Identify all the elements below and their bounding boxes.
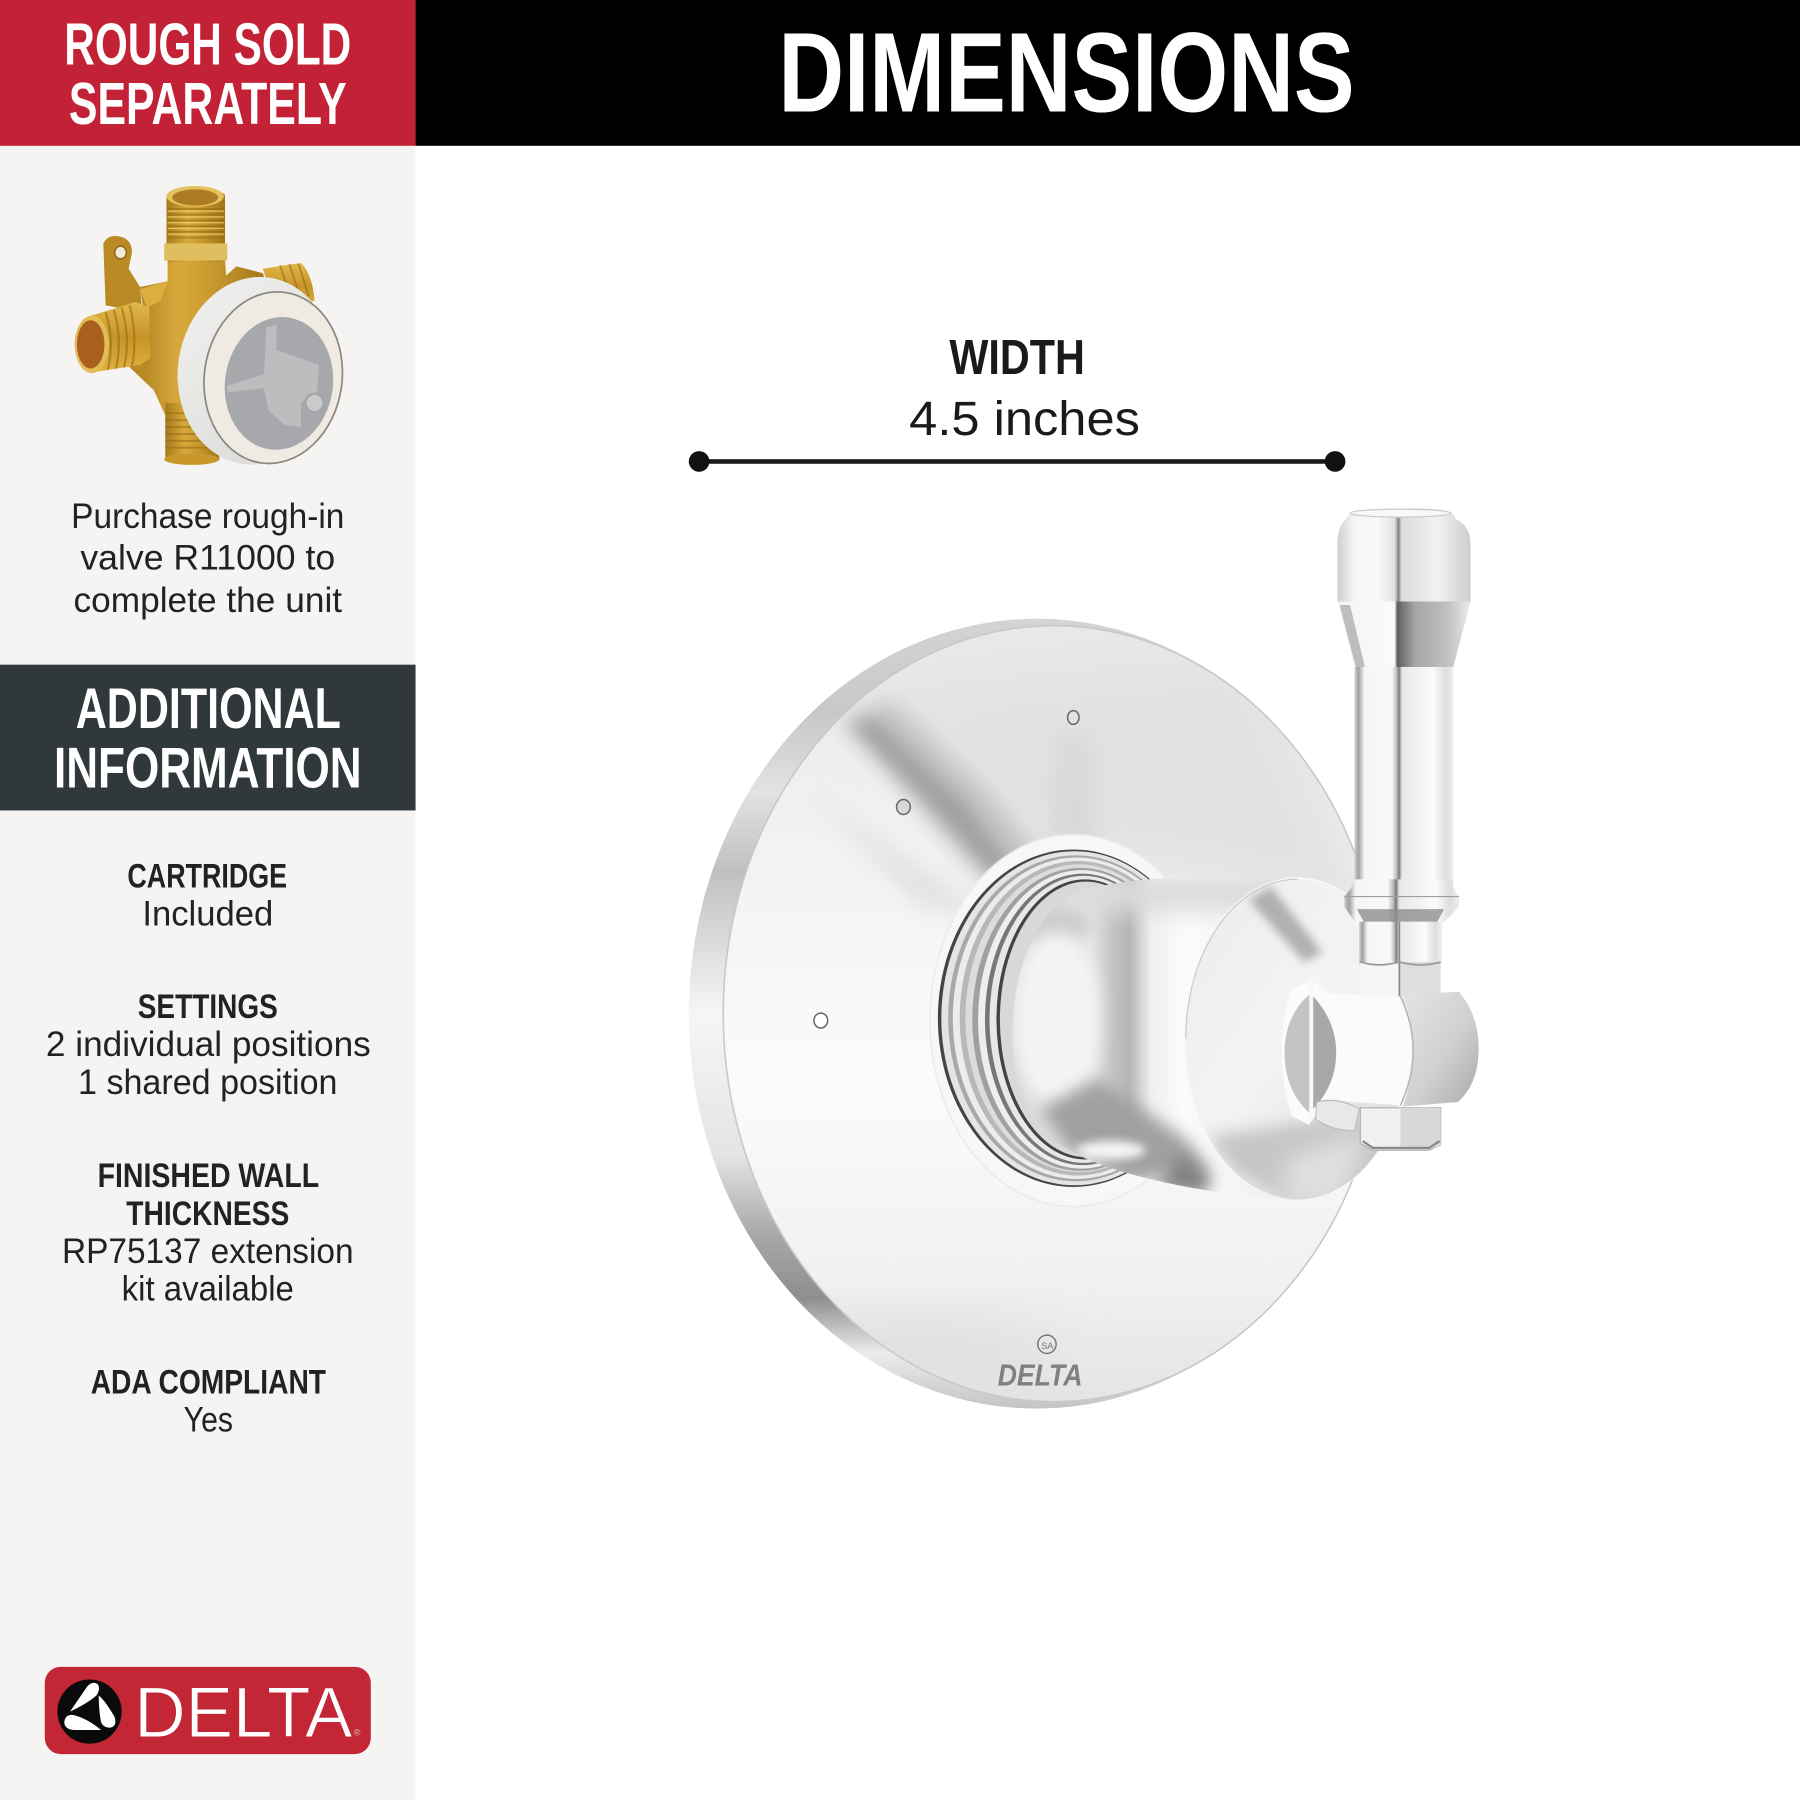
- lever flange: [1344, 879, 1459, 923]
- text: ada compliant: Yes: [184, 1400, 233, 1440]
- text: cartridge: [127, 857, 287, 933]
- image: chrome faucet trim: SA: [1041, 1341, 1054, 1351]
- text: finished wall thickness: [62, 1157, 354, 1309]
- text: width label: WIDTH: [949, 330, 1085, 385]
- lever taper: [1337, 602, 1471, 667]
- text: ada compliant: [91, 1364, 326, 1440]
- header: rough sold separately: ROUGH SOLD: [64, 10, 351, 77]
- top pipe: [164, 186, 227, 262]
- right pipe: [263, 263, 315, 310]
- cone body: [1012, 878, 1257, 1192]
- title: dimensions: DIMENSIONS: [778, 9, 1355, 136]
- text: purchase rough-in note: complete the unit: [73, 580, 342, 620]
- text: settings: SETTINGS: [138, 988, 278, 1026]
- text: finished wall thickness: kit available: [122, 1269, 294, 1309]
- text: purchase rough-in note: valve R11000 to: [80, 537, 335, 577]
- grey plug: [216, 310, 342, 457]
- text: settings: [46, 988, 371, 1102]
- text: finished wall thickness: THICKNESS: [126, 1195, 289, 1233]
- metal hex collar: [193, 283, 353, 473]
- text: width label: 4.5 inches: [909, 392, 1140, 446]
- screw holes: [1068, 711, 1079, 724]
- lever hub: [1282, 978, 1479, 1131]
- text: cartridge: CARTRIDGE: [127, 857, 287, 895]
- panel: left sidebar background: [0, 146, 416, 1800]
- logo: delta: [45, 1667, 371, 1754]
- white seal ring: [166, 267, 346, 475]
- header: rough sold separately: SEPARATELY: [69, 70, 347, 137]
- bottom pipe: [164, 403, 219, 465]
- bottom nub: [1360, 1108, 1441, 1150]
- text: width label: [909, 330, 1140, 446]
- handle disc: [1185, 878, 1410, 1200]
- bracket: [103, 236, 142, 312]
- brand mark on plate: [1038, 1335, 1056, 1353]
- escutcheon collar: [930, 835, 1217, 1207]
- logo: delta: DELTA: [134, 1674, 353, 1753]
- text: finished wall thickness: FINISHED WALL: [98, 1157, 319, 1195]
- header: rough sold separately: [0, 0, 416, 146]
- plate face: [723, 626, 1395, 1402]
- logo: delta: ®: [354, 1728, 361, 1738]
- heading: additional information: ADDITIONAL: [76, 677, 341, 741]
- text: finished wall thickness: RP75137 extension: [62, 1231, 354, 1271]
- lever shaft: [1355, 667, 1453, 880]
- arrow: width dimension line: [689, 451, 1345, 472]
- valve body: [129, 259, 271, 416]
- heading: additional information: [0, 665, 416, 810]
- plate rim: [689, 619, 1384, 1409]
- left pipe: [75, 302, 150, 373]
- image: chrome faucet trim: DELTA: [998, 1358, 1083, 1393]
- chrome ring: [938, 849, 1209, 1187]
- text: ada compliant: ADA COMPLIANT: [91, 1364, 326, 1402]
- image: brass rough-in valve: [75, 186, 353, 475]
- lever neck: [1359, 922, 1442, 996]
- hub shoulder: [1311, 960, 1361, 999]
- image: chrome faucet trim: [689, 509, 1479, 1409]
- title: dimensions: [416, 0, 1800, 146]
- text: settings: 2 individual positions: [46, 1024, 371, 1064]
- text: settings: 1 shared position: [78, 1062, 338, 1102]
- lever cap: [1337, 509, 1471, 603]
- text: purchase rough-in note: [71, 496, 344, 620]
- text: cartridge: Included: [142, 893, 273, 933]
- heading: additional information: INFORMATION: [54, 737, 362, 801]
- text: purchase rough-in note: Purchase rough-in: [71, 496, 344, 536]
